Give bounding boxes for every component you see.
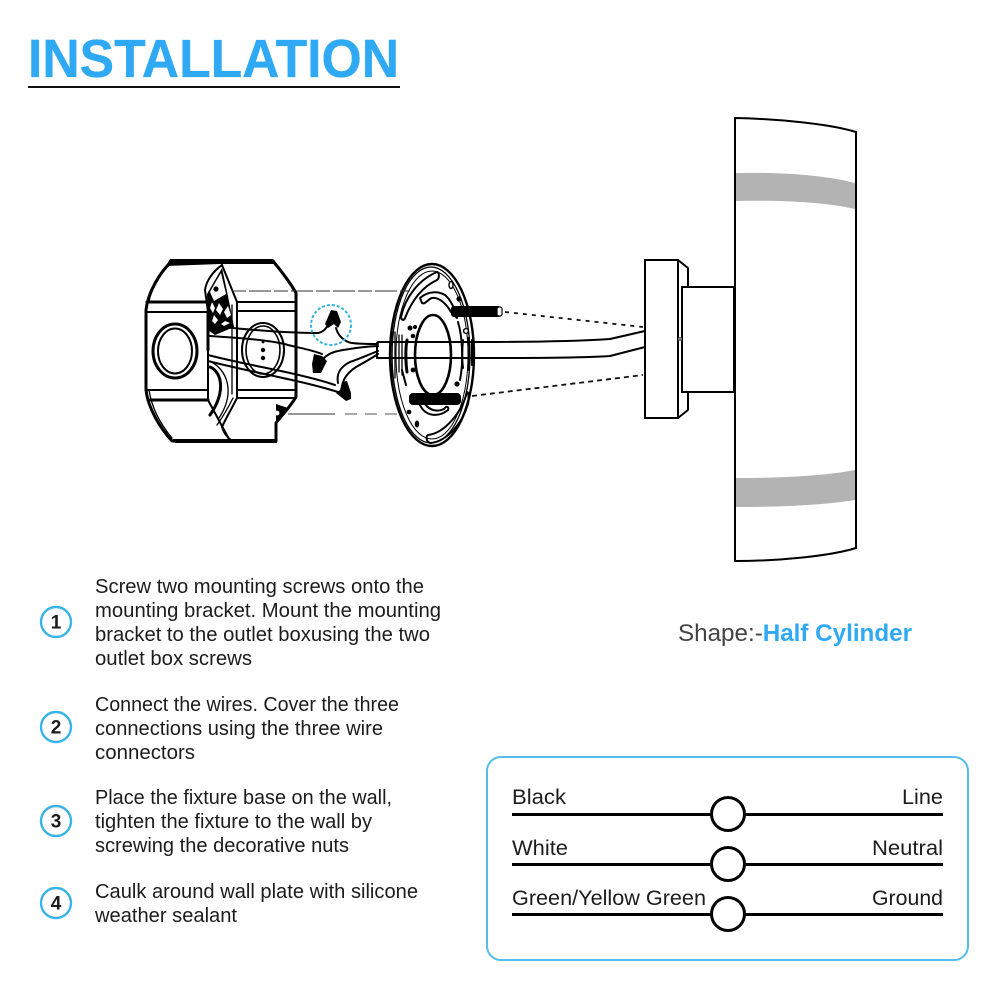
step 1: outlet box screws	[95, 648, 252, 670]
illustration: outlet box	[146, 259, 296, 443]
icon: wire connector left	[312, 354, 327, 373]
box outline	[146, 261, 296, 441]
dashed guide lines	[232, 291, 643, 414]
wiring row: black to line: Black	[512, 785, 566, 809]
step 4: weather sealant	[94, 905, 237, 927]
wire through bracket	[378, 331, 645, 342]
step 4: Caulk around wall plate with silicone	[95, 881, 418, 903]
icon: left knockout	[153, 324, 197, 378]
step 1: Screw two mounting screws onto the	[95, 576, 424, 598]
wiring row: green to ground	[512, 886, 943, 930]
holes	[408, 326, 412, 330]
band lines left	[147, 300, 208, 304]
title: INSTALLATION	[28, 29, 399, 89]
illustration: mounting bracket	[378, 264, 645, 446]
wiring row: black to line	[512, 785, 943, 830]
step 3: 3	[51, 812, 61, 832]
step 4	[41, 881, 418, 927]
wiring row: black to line: Line	[902, 785, 943, 809]
wiring row: green to ground: Ground	[872, 886, 943, 910]
step 3: Place the fixture base on the wall,	[95, 787, 392, 809]
lower slots	[427, 392, 469, 443]
step 2: 2	[51, 718, 61, 738]
step 3	[41, 787, 392, 857]
illustration: half cylinder fixture	[735, 118, 856, 561]
icon: lower screw ear	[276, 404, 288, 423]
step 1	[41, 576, 441, 670]
step 3: screwing the decorative nuts	[95, 835, 349, 857]
upper slots	[401, 272, 439, 320]
step 1: 1	[51, 612, 62, 634]
shape label: Shape:-Half Cylinder	[678, 620, 912, 647]
icon: mounting screws	[451, 306, 501, 317]
wiring row: white to neutral: White	[512, 836, 568, 860]
grey band bottom	[736, 470, 855, 507]
centre seam	[205, 265, 230, 441]
step 3: tighten the fixture to the wall by	[95, 811, 372, 833]
step 2: Connect the wires. Cover the three	[95, 694, 399, 716]
icon: wire connector bottom	[336, 381, 351, 401]
step 2	[41, 694, 399, 764]
illustration: wires	[208, 310, 378, 401]
step 2: connectors	[95, 742, 195, 764]
icon: screw slot lattice	[207, 268, 234, 335]
half moon knockout	[210, 367, 221, 415]
panel: wiring diagram	[487, 757, 968, 960]
step 4: 4	[51, 894, 62, 914]
step 1: mounting bracket. Mount the mounting	[95, 600, 441, 622]
wiring row: green to ground: Green/Yellow Green	[512, 886, 706, 910]
callout: dashed highlight circle	[311, 305, 351, 345]
wiring row: white to neutral: Neutral	[872, 836, 943, 860]
wiring row: white to neutral	[512, 836, 943, 880]
band lines right	[237, 302, 296, 398]
step 1: bracket to the outlet boxusing the two	[95, 624, 430, 646]
illustration: wall plate	[645, 260, 734, 418]
icon: centre knockout	[242, 323, 284, 377]
vertical slots	[406, 340, 407, 372]
icon: wire connector top	[325, 310, 341, 328]
grey band top	[736, 173, 855, 209]
step 2: connections using the three wire	[95, 718, 383, 740]
